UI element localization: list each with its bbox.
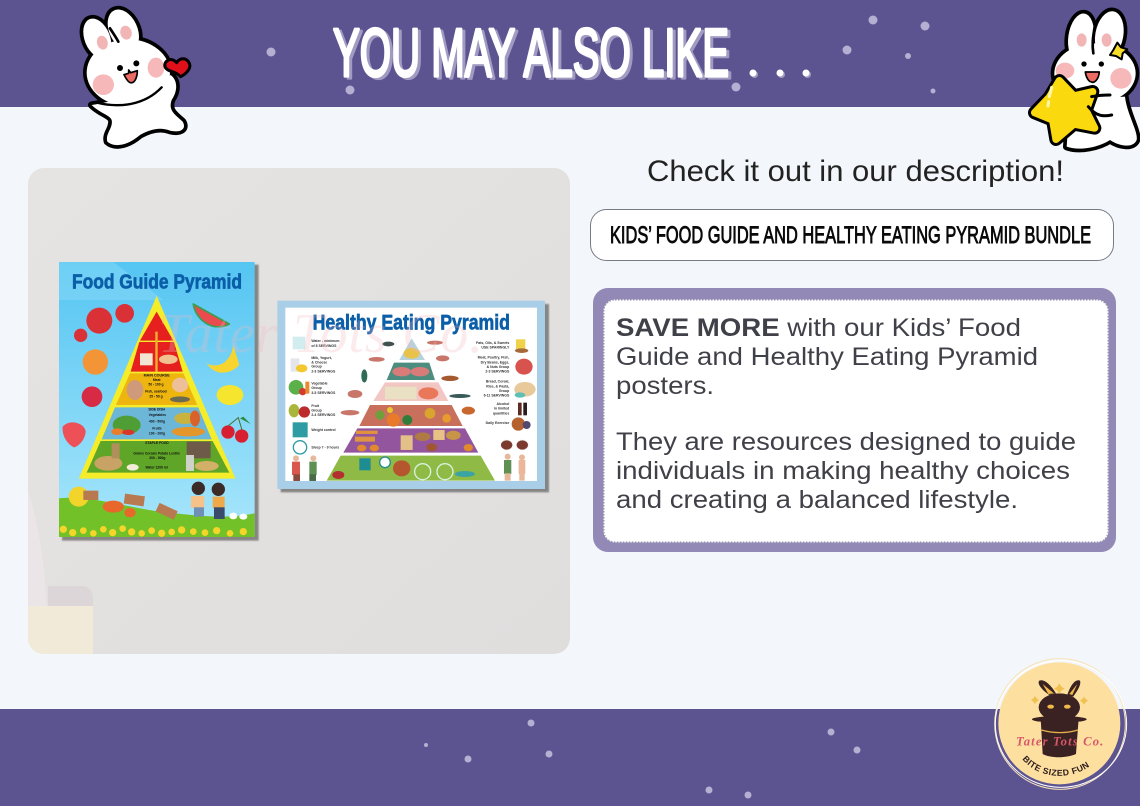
product name pill [590, 210, 1114, 260]
description text: Guide and Healthy Eating Pyramid [616, 343, 1038, 371]
pyramid: Meat [153, 378, 161, 382]
right labels: Dry Beans, Eggs, [481, 360, 509, 364]
pyramid: Fish, seafood [145, 390, 167, 394]
icon: bunny with heart [78, 4, 190, 145]
pyramid: 100 - 200g [149, 432, 165, 436]
pyramid: Grains Cereals Potato Lentils [133, 451, 180, 455]
icon: heart [165, 59, 190, 77]
left labels: Group [311, 408, 322, 412]
left labels: 2-3 SERVINGS [311, 370, 336, 374]
top banner [0, 0, 1140, 107]
pyramid: Fruits [152, 426, 162, 430]
logo: Tater Tots Co.: Tater Tots Co. [1016, 734, 1103, 748]
side icons [289, 337, 536, 481]
right labels: Group [499, 389, 509, 393]
left labels: & Cheese [311, 360, 327, 364]
pyramid: Vegetables [149, 413, 166, 417]
poster title: Food Guide Pyramid [72, 270, 242, 293]
pyramid tiers [327, 338, 495, 481]
right labels: 2-3 SERVINGS [485, 370, 510, 374]
meadow scene [59, 482, 255, 537]
right labels: in limited [494, 407, 509, 411]
hat bunny [1031, 680, 1088, 757]
left labels: Weight control [311, 428, 336, 432]
watermark: Tater Tots Co. [158, 303, 483, 365]
logo: Tater Tots Co. [994, 658, 1128, 790]
description text: and creating a balanced lifestyle. [616, 486, 1018, 514]
pyramid [79, 297, 235, 478]
pyramid: 25 - 50 g [149, 394, 163, 398]
description text: They are resources designed to guide [616, 428, 1076, 456]
right labels: 6-11 SERVINGS [484, 394, 510, 398]
pyramid: 400 - 500g [149, 419, 165, 423]
left labels: of 8 SERVINGS [311, 344, 337, 348]
left labels: Group [311, 386, 322, 390]
left labels: Water - minimum [311, 339, 339, 343]
poster: Healthy Eating Pyramid [277, 301, 549, 492]
pyramid: STAPLE FOOD [145, 441, 169, 445]
bottom banner [0, 709, 1140, 806]
exercise figures [341, 341, 475, 415]
title: YOU MAY ALSO LIKE [333, 15, 729, 91]
description text: SAVE MORE with our Kids’ Food [616, 314, 1021, 342]
icon: large star [1035, 81, 1095, 139]
right labels: Daily Exercise [486, 421, 509, 425]
description text: individuals in making healthy choices [616, 457, 1070, 485]
poster: Food Guide Pyramid [59, 262, 259, 541]
left labels: Milk, Yogurt, [311, 356, 332, 360]
left labels: 2-4 SERVINGS [311, 413, 336, 417]
pyramid: MAIN COURSE [144, 374, 170, 378]
left labels [311, 339, 339, 450]
icon: small star [1110, 43, 1127, 59]
heading: check it out: Check it out in our description! [647, 155, 1064, 188]
right labels [476, 341, 510, 425]
right labels: Bread, Cereal, [486, 380, 509, 384]
left labels: 3-5 SERVINGS [311, 391, 336, 395]
pyramid: 50 - 100 g [148, 383, 164, 387]
right labels: Alcohol [497, 402, 509, 406]
panel: description card [593, 288, 1116, 552]
left labels: Sleep 7 - 9 hours [311, 446, 339, 450]
right labels: & Nuts Group [487, 365, 509, 369]
description text [616, 314, 1076, 514]
chair [28, 490, 93, 654]
pyramid: Water 1200 ml [146, 466, 168, 470]
icon: bunny with star [1035, 9, 1137, 149]
left labels: Vegetable [311, 382, 328, 386]
description text: posters. [616, 372, 714, 400]
left labels: Fruit [311, 404, 320, 408]
pyramid: SIDE DISH [148, 407, 166, 411]
pyramid: 300 - 500g [149, 456, 165, 460]
panel: product photo [28, 168, 570, 654]
right labels: USE SPARINGLY [481, 346, 510, 350]
right labels: Fats, Oils, & Sweets [476, 341, 509, 345]
right labels: quantities [493, 411, 509, 415]
title: YOU MAY ALSO LIKE [336, 17, 732, 93]
logo: Tater Tots Co.: BITE SIZED FUN [1022, 756, 1090, 776]
poster title: Healthy Eating Pyramid [313, 311, 510, 334]
left labels: Group [311, 365, 322, 369]
fruit characters [63, 304, 251, 447]
right labels: Meat, Poultry, Fish, [478, 356, 509, 360]
right labels: Rice, & Pasta, [486, 384, 509, 388]
